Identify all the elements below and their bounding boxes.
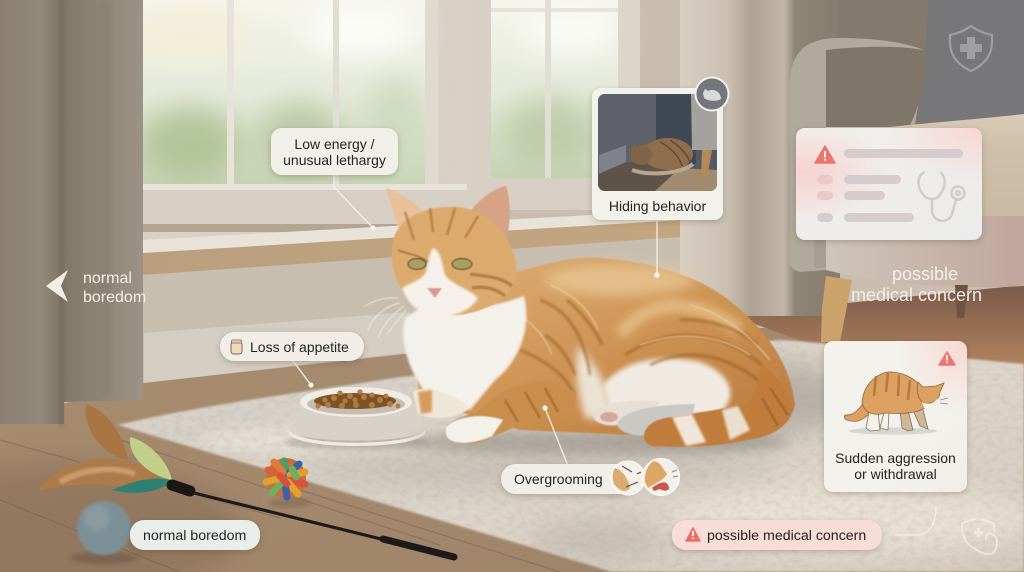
arrow and label: normal boredom — [46, 270, 146, 306]
arrow and label: normal boredom: normal — [83, 270, 132, 287]
floor — [0, 310, 1024, 572]
arrow and label: normal boredom: boredom — [83, 289, 146, 306]
icon: stethoscope — [919, 172, 964, 221]
front legs — [413, 389, 470, 418]
cat — [365, 186, 795, 455]
hiding scene photo — [598, 94, 717, 191]
callout: loss of appetite: Loss of appetite — [250, 339, 349, 355]
callout: sudden aggression: or withdrawal — [854, 466, 937, 482]
hind paws — [592, 400, 660, 425]
icon: cat licking 2 — [642, 458, 680, 496]
food bowl — [284, 387, 428, 450]
sofa — [790, 0, 1024, 342]
label: possible medical concern: possible — [892, 264, 958, 284]
callout: low energy: Low energy / — [294, 136, 375, 152]
callout: possible medical concern pill — [672, 520, 882, 550]
lower wall — [142, 212, 690, 385]
cat body — [410, 258, 795, 440]
checklist bars — [817, 149, 963, 222]
callout: overgrooming — [501, 458, 680, 496]
yarn ball toy — [266, 458, 312, 507]
chest — [403, 296, 526, 410]
baseboard — [144, 312, 410, 383]
callout: normal boredom pill: normal boredom — [143, 528, 246, 544]
panel: medical checklist card — [796, 128, 982, 240]
callout: normal boredom pill — [130, 520, 260, 550]
stripes — [520, 300, 775, 395]
icon: jar — [231, 340, 242, 354]
wooden ledge — [142, 220, 680, 275]
feather wand toy — [38, 405, 454, 557]
sheer curtain right — [680, 0, 840, 316]
callout: hiding behavior — [592, 78, 728, 220]
curtain left — [0, 0, 143, 426]
window right — [467, 0, 651, 210]
leader lines — [293, 175, 936, 535]
callout: low energy: unusual lethargy — [283, 152, 386, 168]
callout: possible medical concern pill: possible medical concern — [707, 528, 866, 544]
label: possible medical concern: medical concern — [851, 285, 982, 305]
icon: shield with cross — [950, 26, 992, 71]
illustration: arched cat — [844, 372, 948, 434]
callout: sudden aggression: Sudden aggression — [835, 450, 956, 466]
callout: sudden aggression — [824, 341, 967, 492]
wall behind sofa — [838, 0, 1024, 130]
callout: loss of appetite — [220, 332, 364, 361]
tail — [644, 365, 790, 447]
icon: shield and heart outline — [962, 519, 997, 554]
belly — [603, 358, 730, 420]
blue felt ball toy — [70, 501, 138, 564]
icon: warning triangle pill — [686, 528, 700, 541]
label: possible medical concern — [851, 264, 982, 305]
icon: cat licking 1 — [611, 461, 645, 495]
cat head — [386, 186, 517, 316]
callout: overgrooming: Overgrooming — [514, 471, 603, 487]
callout: low energy — [271, 128, 398, 175]
rug — [110, 330, 1024, 572]
icon: warning triangle small — [939, 352, 955, 365]
icon: sleeping cat badge — [696, 78, 728, 110]
whiskers — [365, 298, 406, 338]
icon: warning triangle — [815, 146, 835, 163]
window left — [130, 0, 482, 240]
callout: hiding behavior: Hiding behavior — [609, 198, 706, 214]
